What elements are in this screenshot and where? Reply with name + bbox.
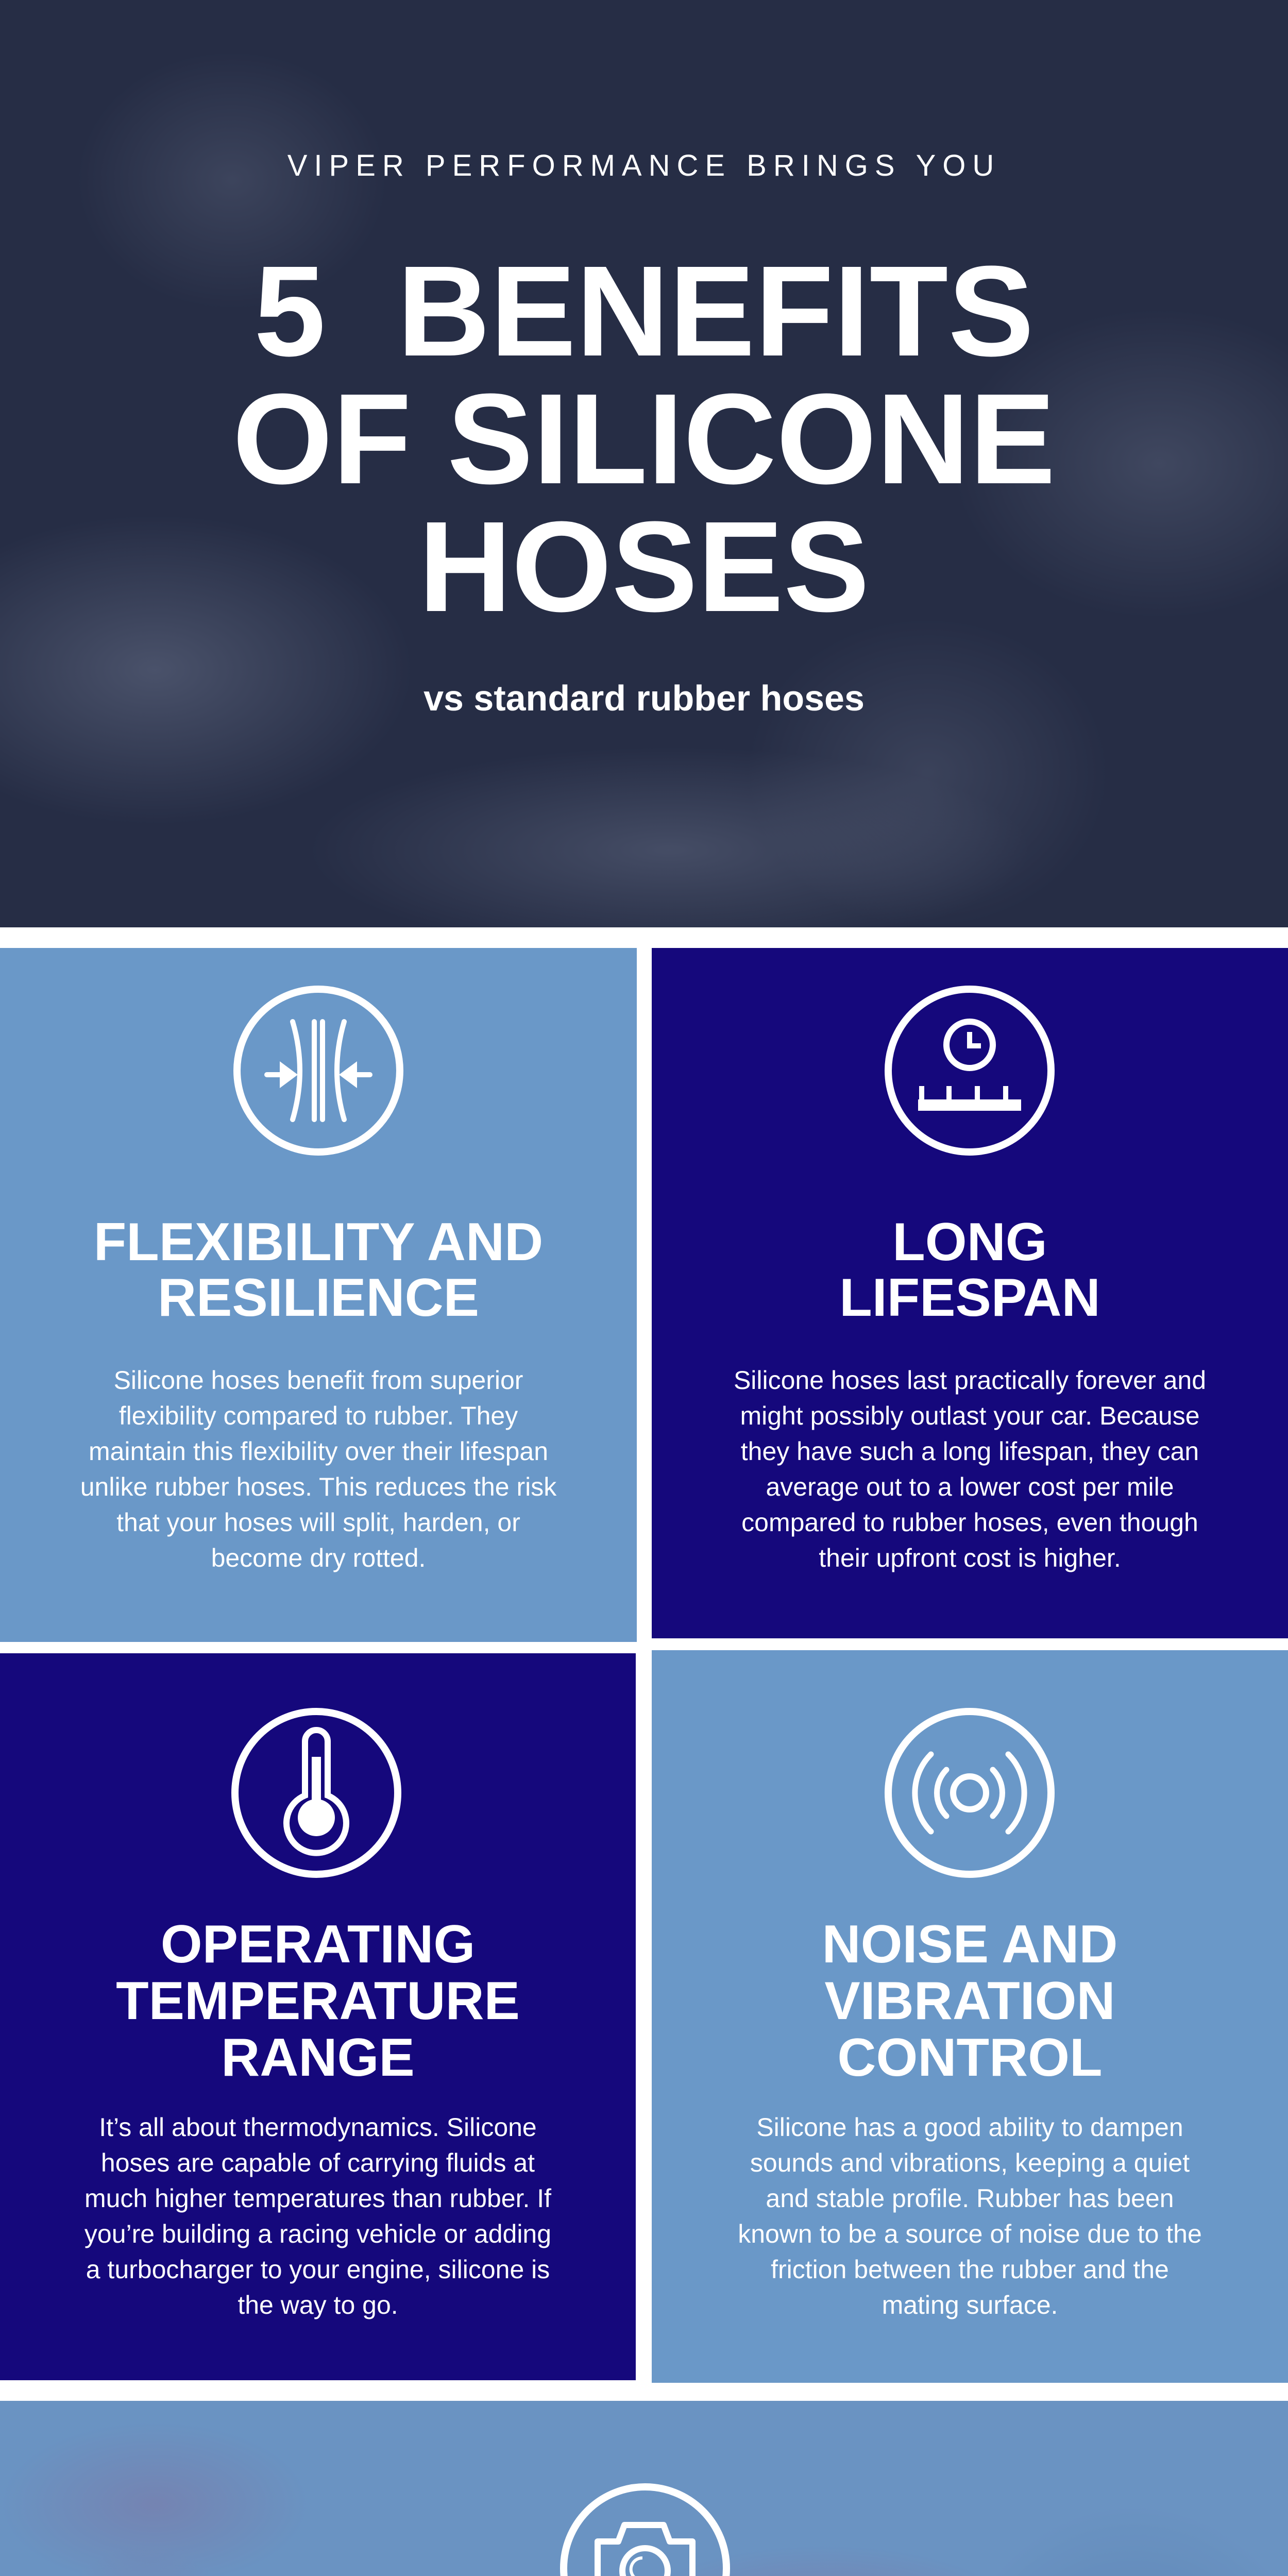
icon: vibration waves bbox=[885, 1708, 1055, 1878]
header kicker text: VIPER PERFORMANCE BRINGS YOU bbox=[287, 149, 1001, 182]
body text: a turbocharger to your engine, silicone is bbox=[86, 2255, 550, 2284]
body text: Silicone hoses benefit from superior bbox=[114, 1366, 523, 1395]
icon: clock on ruler bbox=[885, 986, 1055, 1156]
heading: LIFESPAN bbox=[839, 1268, 1100, 1328]
main title: OF SILICONE bbox=[232, 367, 1056, 511]
body text bbox=[80, 1366, 556, 1572]
body text: that your hoses will split, harden, or bbox=[116, 1508, 520, 1537]
main title bbox=[232, 239, 1056, 638]
heading bbox=[822, 1914, 1117, 2088]
panel: operating temperature range bbox=[0, 1653, 636, 2380]
header: dark engine photo banner bbox=[0, 0, 1288, 927]
body text: mating surface. bbox=[882, 2291, 1058, 2319]
body text: much higher temperatures than rubber. If bbox=[84, 2184, 551, 2213]
main title: 5 BENEFITS bbox=[254, 239, 1034, 383]
heading bbox=[116, 1914, 520, 2088]
body text: they have such a long lifespan, they can bbox=[741, 1437, 1199, 1466]
heading bbox=[94, 1212, 543, 1328]
panel: flexibility and resilience bbox=[0, 948, 637, 1642]
body text: hoses are capable of carrying fluids at bbox=[101, 2148, 535, 2177]
heading: FLEXIBILITY AND bbox=[94, 1212, 543, 1272]
heading: TEMPERATURE bbox=[116, 1971, 520, 2031]
subtitle: vs standard rubber hoses bbox=[423, 678, 865, 718]
body text bbox=[84, 2113, 551, 2319]
body text bbox=[734, 1366, 1206, 1572]
body text: and stable profile. Rubber has been bbox=[766, 2184, 1174, 2213]
body text: friction between the rubber and the bbox=[771, 2255, 1169, 2284]
body text: It’s all about thermodynamics. Silicone bbox=[99, 2113, 537, 2142]
body text: Silicone has a good ability to dampen bbox=[756, 2113, 1183, 2142]
body text: Silicone hoses last practically forever and bbox=[734, 1366, 1206, 1395]
body text bbox=[738, 2113, 1202, 2319]
body text: might possibly outlast your car. Because bbox=[740, 1401, 1200, 1430]
body text: the way to go. bbox=[238, 2291, 398, 2319]
panel: aesthetics with engine photo bbox=[0, 2401, 1288, 2576]
body text: maintain this flexibility over their lifespan bbox=[89, 1437, 548, 1466]
body text: compared to rubber hoses, even though bbox=[741, 1508, 1198, 1537]
body text: become dry rotted. bbox=[211, 1544, 426, 1572]
body text: unlike rubber hoses. This reduces the risk bbox=[80, 1472, 556, 1501]
icon: camera bbox=[560, 2483, 730, 2576]
heading: RANGE bbox=[221, 2028, 415, 2088]
heading bbox=[839, 1212, 1100, 1328]
panel: long lifespan bbox=[652, 948, 1288, 1638]
icon: compression arrows bbox=[233, 986, 403, 1156]
heading: VIBRATION bbox=[824, 1971, 1115, 2031]
heading: OPERATING bbox=[161, 1914, 475, 1974]
main title: HOSES bbox=[418, 495, 870, 638]
body text: known to be a source of noise due to the bbox=[738, 2219, 1202, 2248]
body text: average out to a lower cost per mile bbox=[766, 1472, 1174, 1501]
heading: CONTROL bbox=[837, 2028, 1103, 2088]
heading: NOISE AND bbox=[822, 1914, 1117, 1974]
body text: sounds and vibrations, keeping a quiet bbox=[750, 2148, 1190, 2177]
panel: noise and vibration control bbox=[652, 1650, 1288, 2383]
body text: their upfront cost is higher. bbox=[819, 1544, 1121, 1572]
body text: you’re building a racing vehicle or adding bbox=[84, 2219, 551, 2248]
heading: RESILIENCE bbox=[158, 1268, 479, 1328]
body text: flexibility compared to rubber. They bbox=[119, 1401, 518, 1430]
icon: thermometer bbox=[231, 1708, 401, 1878]
heading: LONG bbox=[892, 1212, 1047, 1272]
